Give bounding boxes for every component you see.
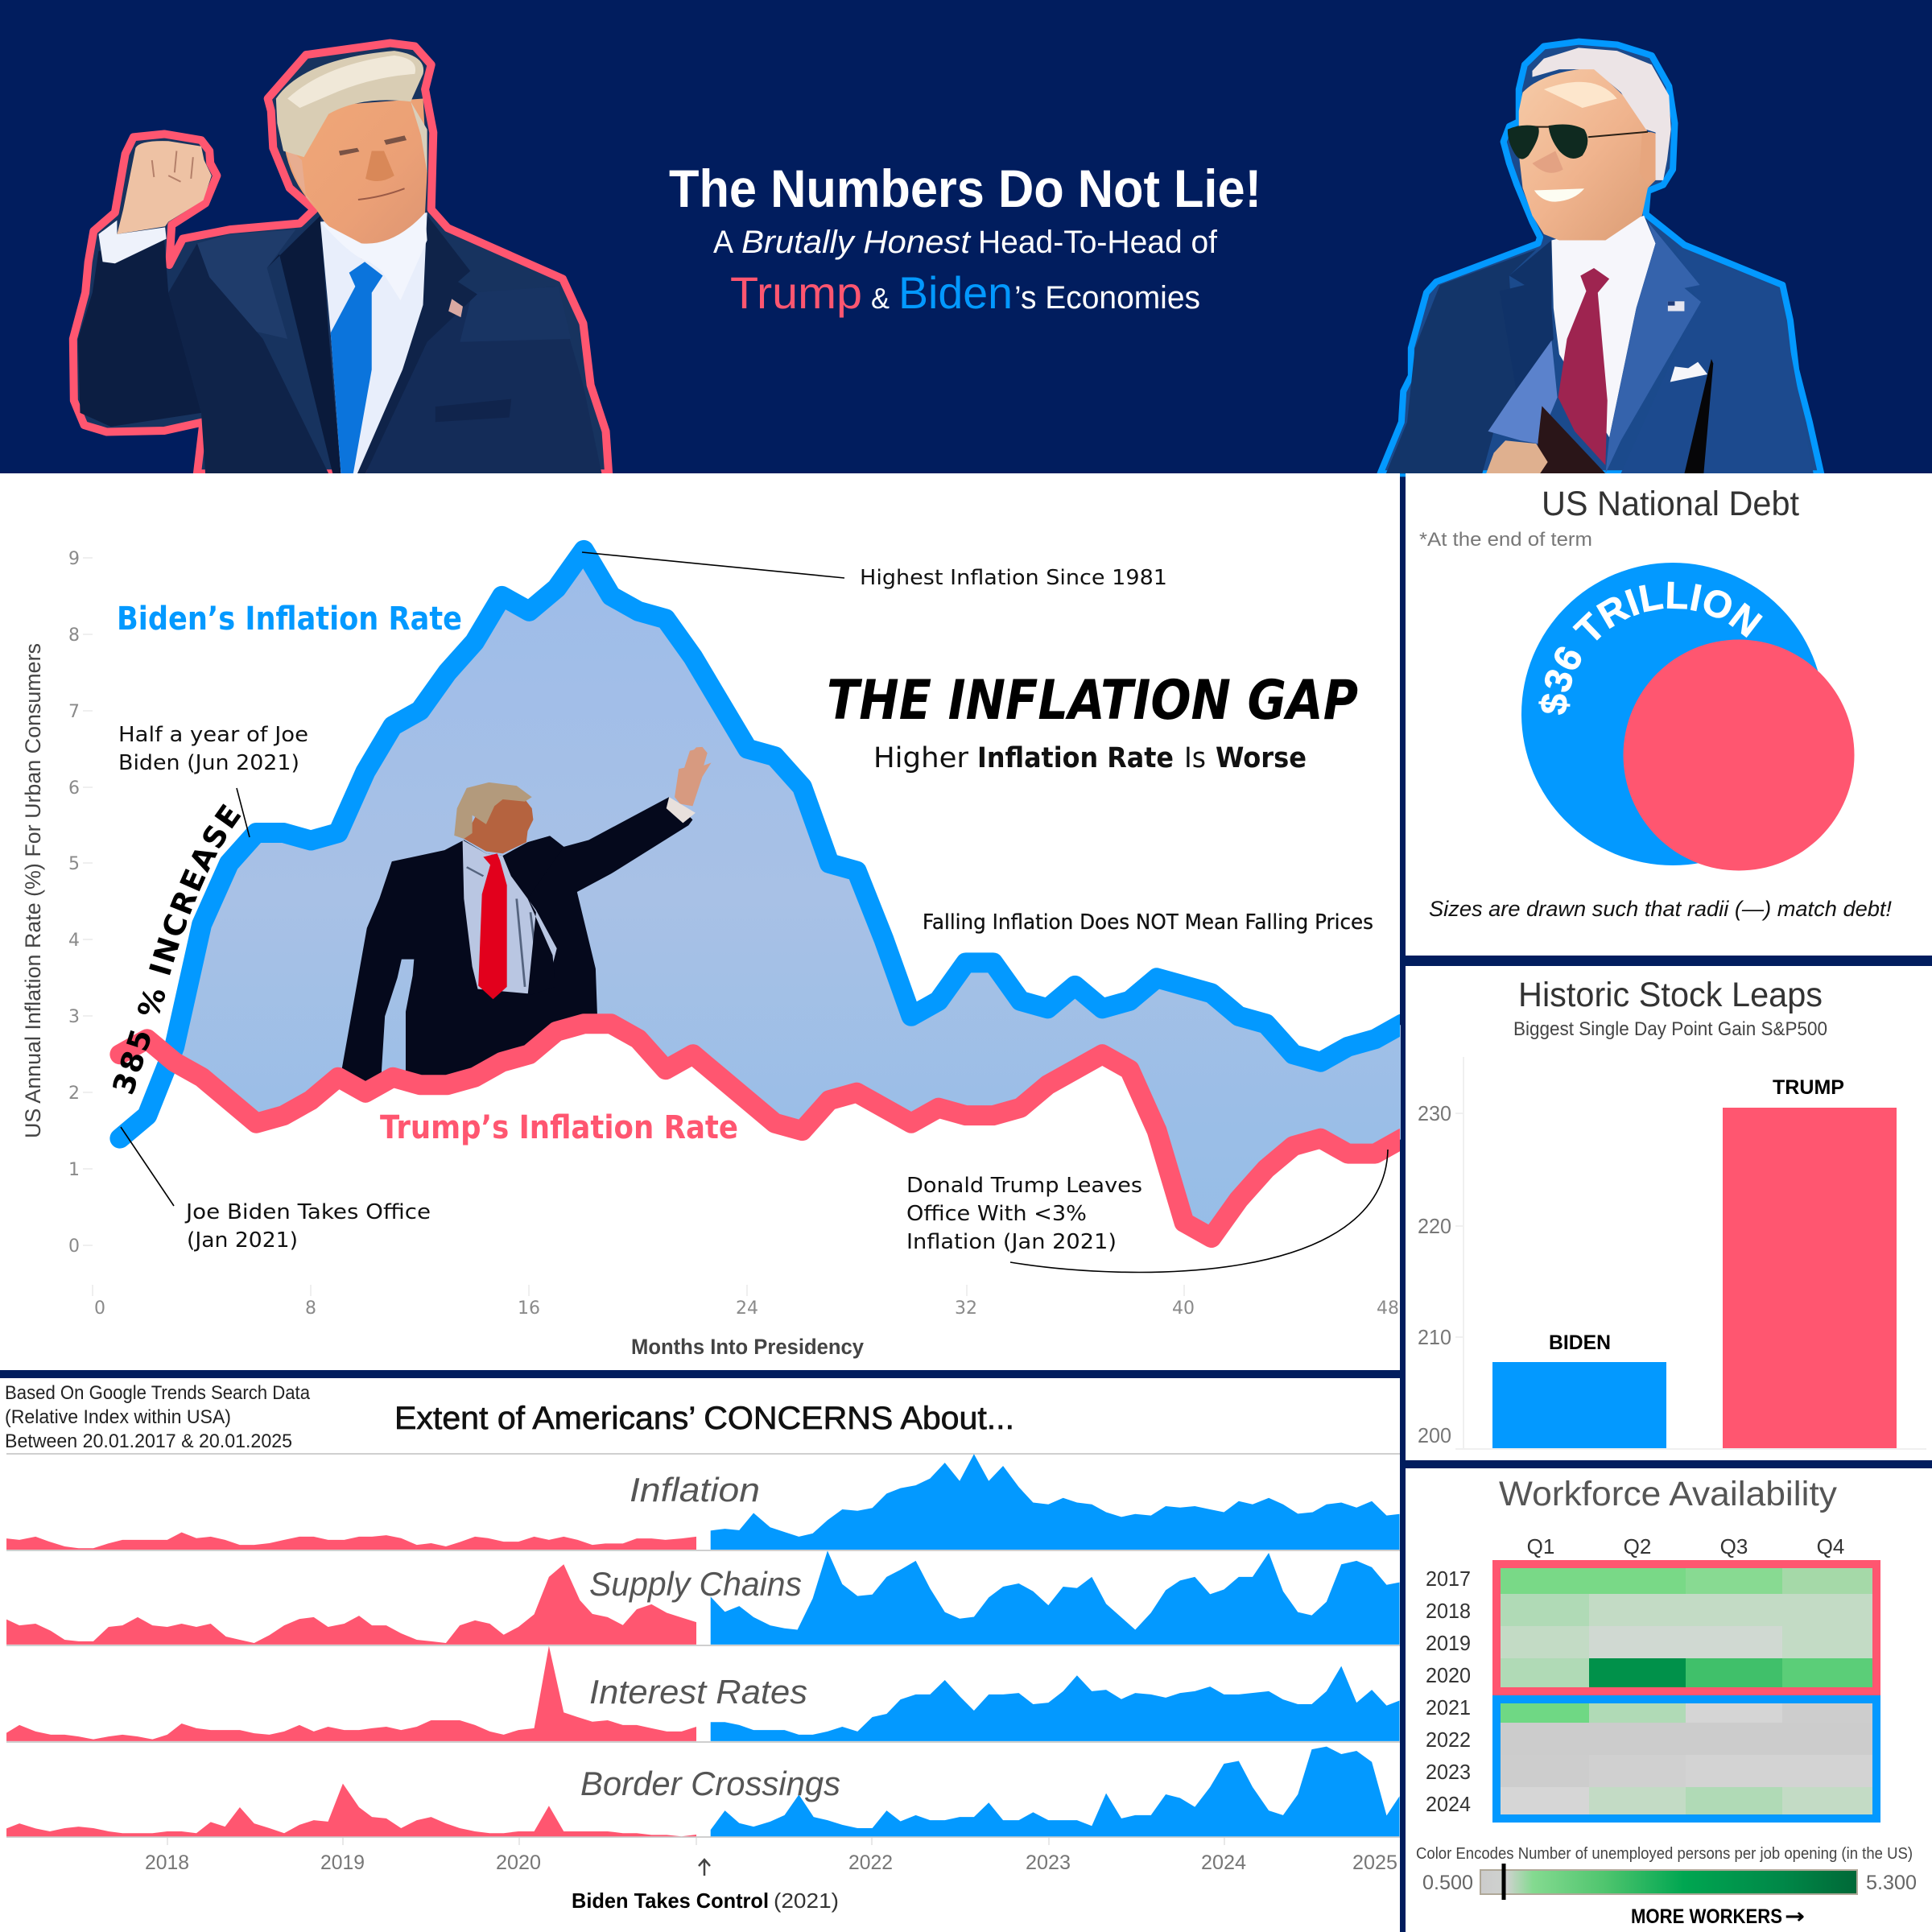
line: Trump inflation: [120, 1024, 1402, 1238]
line group: [120, 550, 1402, 1238]
y axis ticks: 6: [68, 778, 80, 799]
axis: [1418, 1057, 1926, 1449]
x axis ticks: 16: [518, 1298, 540, 1319]
curved label: 385 percent increase: 385 % INCREASE: [113, 803, 242, 1095]
annotation: Joe Biden takes office: Joe Biden Takes Office: [184, 1200, 431, 1224]
subtitle names line: Trump: [730, 267, 862, 318]
subtitle line: Head-To-Head of: [978, 225, 1218, 260]
annotation: falling inflation: Falling Inflation Does NOT Mean Falling Prices: [923, 910, 1373, 935]
line: Biden inflation: [120, 550, 1402, 1138]
panel: workforce availability: [1406, 1468, 1932, 1932]
axis: 210: [1418, 1325, 1451, 1349]
axis: 220: [1418, 1214, 1451, 1238]
series labels: [580, 1471, 840, 1802]
subtitle line: Brutally Honest: [741, 225, 972, 260]
y axis ticks: 7: [68, 702, 80, 722]
time axis labels: 2020: [496, 1852, 541, 1874]
year labels: 2020: [1426, 1663, 1471, 1687]
heatmap: Biden years: [1492, 1695, 1880, 1823]
annotation: half a year of Joe Biden: [118, 723, 308, 837]
source note: Between 20.01.2017 & 20.01.2025: [5, 1430, 292, 1452]
headline: The Numbers Do Not Lie!: [669, 159, 1261, 218]
heading: Workforce Availability: [1499, 1475, 1838, 1513]
photo figure: Trump waving: [339, 747, 712, 1084]
banner: [0, 0, 1932, 473]
gap area with photo: [182, 568, 1401, 1224]
bar: Biden: [1492, 1331, 1666, 1448]
chart subheading: Higher: [873, 742, 969, 774]
year labels: 2019: [1426, 1631, 1471, 1655]
panel: inflation gap chart: [0, 473, 1401, 1370]
year labels: 2024: [1426, 1792, 1471, 1816]
annotation: half a year of Joe Biden: Biden (Jun 2021): [118, 751, 299, 775]
heatmap: Trump years: [1492, 1560, 1880, 1695]
x axis ticks: 0: [94, 1298, 105, 1319]
series labels: Interest Rates: [589, 1673, 807, 1711]
y axis ticks: 1: [68, 1160, 80, 1180]
caption: Sizes are drawn such that radii (—) match debt!: [1429, 897, 1892, 921]
heading: Historic Stock Leaps: [1518, 976, 1823, 1014]
heading: US National Debt: [1542, 485, 1799, 523]
quarter labels: [1527, 1534, 1844, 1558]
annotation: Trump leaves office: Donald Trump Leaves: [906, 1174, 1142, 1198]
axis: 200: [1418, 1423, 1451, 1447]
quarter labels: Q3: [1720, 1534, 1748, 1558]
y axis ticks: 0: [68, 1236, 80, 1257]
subtitle names line: Biden: [898, 267, 1013, 318]
year labels: 2017: [1426, 1567, 1471, 1591]
year labels: 2021: [1426, 1695, 1471, 1719]
panel: national debt: [1406, 473, 1932, 956]
x axis title: Months Into Presidency: [631, 1335, 864, 1359]
y axis ticks: 8: [68, 625, 80, 646]
note: *At the end of term: [1419, 529, 1592, 551]
chart subheading: Inflation Rate: [977, 742, 1174, 774]
legend: 0.500: [1422, 1872, 1473, 1894]
annotation: Joe Biden takes office: (Jan 2021): [187, 1228, 298, 1253]
panel: search concerns: [0, 1378, 1400, 1932]
quarter labels: Q2: [1624, 1534, 1651, 1558]
time axis labels: [145, 1838, 1397, 1874]
circle: Trump debt: [1623, 639, 1855, 871]
caption: Biden takes control: Biden Takes Control: [572, 1889, 769, 1913]
y axis ticks: 9: [68, 549, 80, 569]
area charts: Biden years: [711, 1454, 1400, 1836]
y axis ticks: [68, 549, 1184, 1296]
portrait: Biden with blue outline: [1381, 42, 1821, 473]
time axis labels: 2019: [320, 1852, 365, 1874]
panel: stock leaps: [1406, 966, 1932, 1460]
year labels: 2023: [1426, 1760, 1471, 1784]
baselines: [6, 1454, 1400, 1837]
curved label: 36 trillion: $36 TRILLION: [1538, 581, 1763, 715]
source note: [5, 1382, 311, 1452]
series labels: Supply Chains: [589, 1565, 802, 1603]
series labels: Inflation: [630, 1471, 760, 1509]
annotation: Trump leaves office: Office With <3%: [906, 1202, 1087, 1226]
y axis ticks: 2: [68, 1084, 80, 1104]
year labels: 2018: [1426, 1599, 1471, 1623]
x axis ticks: 40: [1172, 1298, 1195, 1319]
circle: Biden debt: [1521, 563, 1824, 865]
chart subheading: [873, 742, 1307, 774]
bar: Biden: BIDEN: [1549, 1331, 1611, 1354]
bar: Trump: TRUMP: [1773, 1076, 1844, 1099]
label: more workers: MORE WORKERS: [1631, 1905, 1782, 1928]
legend: 5.300: [1866, 1872, 1917, 1894]
portrait: Trump with pink outline: [73, 43, 609, 473]
x axis ticks: 8: [305, 1298, 316, 1319]
annotation: Joe Biden takes office: [121, 1127, 431, 1253]
heading: Extent of Americans’ CONCERNS About...: [394, 1401, 1014, 1436]
y axis ticks: 3: [68, 1007, 80, 1027]
series labels: Border Crossings: [580, 1765, 840, 1802]
time axis labels: 2018: [145, 1852, 189, 1874]
time axis labels: 2022: [848, 1852, 893, 1874]
subheading: Biggest Single Day Point Gain S&P500: [1513, 1018, 1827, 1040]
source note: (Relative Index within USA): [5, 1406, 231, 1428]
chart subheading: Is: [1184, 742, 1206, 774]
arrow: Biden takes control: [699, 1860, 710, 1876]
label: Trump inflation rate: Trump’s Inflation Rate: [380, 1109, 738, 1146]
time axis labels: 2024: [1201, 1852, 1246, 1874]
subtitle names line: &: [871, 282, 890, 315]
annotation: Trump leaves office: [906, 1150, 1388, 1272]
source note: Based On Google Trends Search Data: [5, 1382, 311, 1404]
legend: [1416, 1845, 1917, 1900]
chart heading: THE INFLATION GAP: [827, 669, 1358, 733]
chart subheading: Worse: [1216, 742, 1307, 774]
y axis ticks: 4: [68, 931, 80, 951]
y axis ticks: 5: [68, 854, 80, 874]
annotation: Trump leaves office: Inflation (Jan 2021): [906, 1230, 1117, 1254]
subtitle names line: ’s Economies: [1014, 280, 1200, 316]
annotation: half a year of Joe Biden: Half a year of Joe: [118, 723, 308, 747]
label: more workers: →: [1785, 1905, 1805, 1929]
year labels: 2022: [1426, 1728, 1471, 1752]
x axis ticks: 24: [736, 1298, 758, 1319]
area charts: Trump years: [6, 1533, 696, 1836]
time axis labels: 2023: [1026, 1852, 1071, 1874]
y axis title: US Annual Inflation Rate (%) For Urban Consumers: [21, 643, 45, 1138]
title: [669, 159, 1261, 318]
quarter labels: Q1: [1527, 1534, 1554, 1558]
label: Biden inflation rate: Biden’s Inflation Rate: [117, 601, 462, 638]
bar: Trump: [1723, 1076, 1897, 1448]
annotation: highest inflation: Highest Inflation Since 1981: [860, 566, 1167, 590]
subtitle names line: [730, 267, 1200, 318]
axis: 230: [1418, 1101, 1451, 1125]
subtitle line: [713, 225, 1218, 260]
x axis ticks: [94, 1298, 1399, 1319]
year labels: [1426, 1567, 1471, 1816]
caption: Biden takes control: (2021): [774, 1889, 839, 1913]
annotation: highest inflation: [582, 552, 1167, 590]
subtitle line: A: [713, 225, 733, 260]
quarter labels: Q4: [1817, 1534, 1844, 1558]
time axis labels: 2025: [1352, 1852, 1397, 1874]
x axis ticks: 48: [1377, 1298, 1399, 1319]
x axis ticks: 32: [955, 1298, 977, 1319]
